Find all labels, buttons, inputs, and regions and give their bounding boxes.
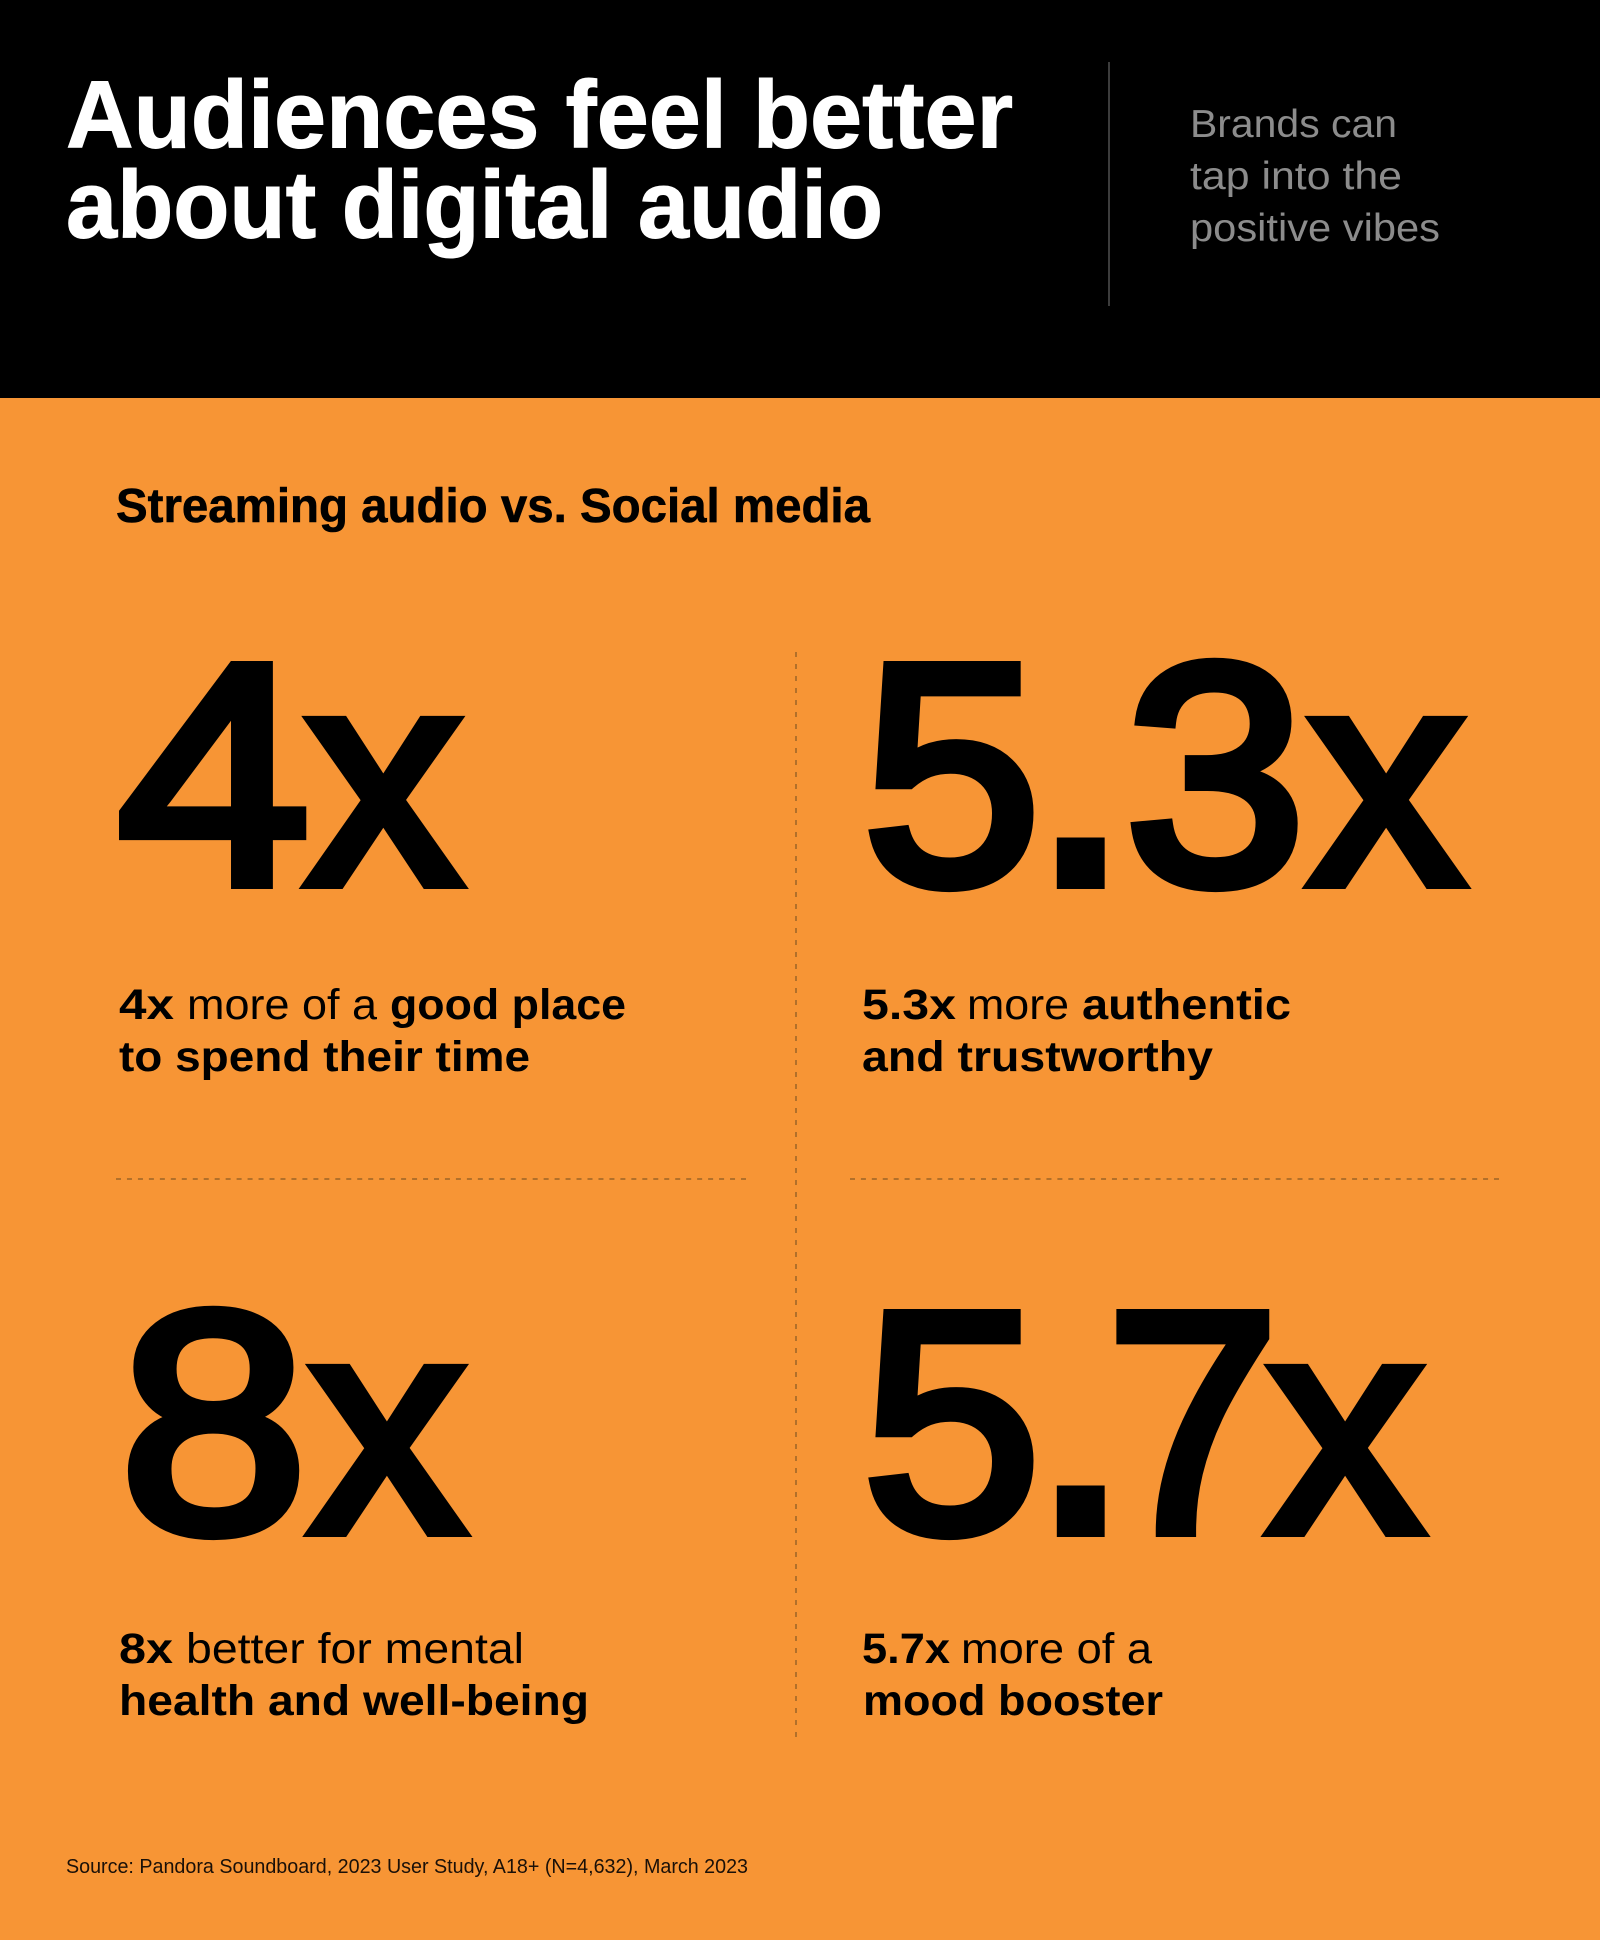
section heading: Streaming audio vs. Social media [116, 480, 870, 533]
stat description 5.3x: and trustworthy [862, 1033, 1213, 1081]
big number 5.7x: 5 [863, 1248, 1041, 1598]
big number 8x [120, 1248, 464, 1598]
stat description 5.3x [862, 981, 1291, 1081]
stat description 8x: health and well-being [119, 1677, 589, 1725]
subtitle: tap into the [1190, 155, 1402, 198]
big number 5.3x: 5 [863, 600, 1041, 950]
stat description 5.3x: 5.3x [862, 981, 956, 1029]
title: about digital audio [66, 152, 883, 258]
stat description 8x: 8x [119, 1625, 173, 1673]
stat panel: 5.7x [862, 1224, 1422, 1725]
subtitle [1190, 103, 1440, 250]
big number 4x [118, 599, 461, 950]
stat description 4x: good place [390, 981, 626, 1029]
stat description 5.7x [862, 1625, 1163, 1725]
big number 5.3x [863, 576, 1463, 963]
subtitle: positive vibes [1190, 207, 1440, 250]
big number 5.3x: . [1034, 576, 1128, 963]
stat description 4x: 4x [119, 981, 174, 1029]
stat description 5.3x: authentic [1082, 981, 1291, 1029]
big number 5.7x: . [1034, 1224, 1128, 1611]
stat description 8x [119, 1625, 589, 1725]
big number 4x: x [307, 607, 461, 948]
big number 5.3x: 3 [1125, 599, 1306, 950]
title: Audiences feel better [66, 62, 1013, 168]
stat description 4x [119, 981, 626, 1081]
source note: Source: Pandora Soundboard, 2023 User Study, A18+ (N=4,632), March 2023 [66, 1856, 748, 1878]
stat description 5.3x: more [967, 981, 1069, 1029]
big number 8x: 8 [120, 1248, 307, 1598]
big number 5.3x: x [1310, 607, 1463, 948]
subtitle: Brands can [1190, 103, 1397, 146]
big number 5.7x [863, 1224, 1422, 1611]
stat description 4x: more of a [187, 981, 377, 1029]
stat description 5.7x: 5.7x [862, 1625, 950, 1673]
stat description 5.7x: mood booster [863, 1677, 1163, 1725]
stat description 4x: to spend their time [119, 1033, 530, 1081]
title [66, 62, 1013, 258]
header band [0, 0, 1600, 398]
big number 8x: x [310, 1255, 464, 1596]
big number 5.7x: x [1268, 1255, 1422, 1596]
stat panel: 5.3x [862, 576, 1463, 1081]
stat panel: 8x [119, 1248, 589, 1725]
big number 5.7x: 7 [1106, 1247, 1279, 1598]
stat panel: 4x [118, 599, 626, 1081]
big number 4x: 4 [118, 599, 310, 950]
stat description 5.7x: more of a [961, 1625, 1152, 1673]
stat description 8x: better for mental [186, 1625, 524, 1673]
